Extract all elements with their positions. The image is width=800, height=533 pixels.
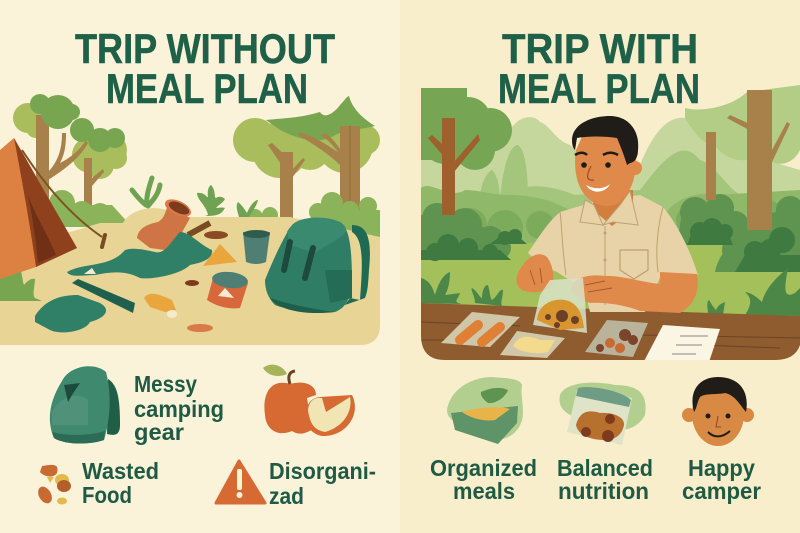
label: disorganized: zad <box>269 483 304 509</box>
bushes <box>421 194 800 272</box>
label: organized meals: meals <box>453 478 515 504</box>
label: organized meals: Organized <box>430 455 537 481</box>
label: messy camping gear: Messy <box>134 371 197 397</box>
trees <box>13 94 380 218</box>
label: balanced nutrition <box>557 455 653 504</box>
label: disorganized: Disorgani- <box>269 458 376 484</box>
icon: balanced nutrition bag <box>559 383 646 445</box>
icon: apple <box>263 365 355 436</box>
backpack <box>265 218 370 313</box>
plants over ground <box>0 272 42 301</box>
label: balanced nutrition: Balanced <box>557 455 653 481</box>
label: messy camping gear: camping <box>134 396 224 422</box>
label: wasted food: Wasted <box>82 458 159 484</box>
label: balanced nutrition: nutrition <box>558 478 649 504</box>
trees <box>428 90 790 230</box>
ziplock bag <box>533 278 587 333</box>
title: trip without meal plan: MEAL PLAN <box>106 65 308 112</box>
title: trip with meal plan: MEAL PLAN <box>498 65 700 112</box>
label: disorganized <box>269 458 376 509</box>
icon: wasted food <box>35 465 71 506</box>
label: wasted food: Food <box>82 482 132 508</box>
can <box>207 270 249 308</box>
title: trip with meal plan: TRIP WITH <box>502 25 698 72</box>
label: happy camper <box>682 455 761 504</box>
title: trip without meal plan: TRIP WITHOUT <box>75 25 335 72</box>
bushes and plants <box>49 178 383 238</box>
label: happy camper: camper <box>682 478 761 504</box>
label: organized meals <box>430 455 537 504</box>
icon: organized meals box <box>447 377 523 444</box>
label: messy camping gear <box>134 371 224 445</box>
meadow <box>421 243 800 320</box>
foreground plants <box>421 268 800 316</box>
table <box>421 303 800 360</box>
label: wasted food <box>82 458 159 508</box>
panel: forest scene with camper <box>421 85 800 365</box>
icon: backpack <box>50 366 120 444</box>
icon: warning triangle <box>216 461 265 503</box>
food packets <box>441 312 720 365</box>
forest background <box>421 85 800 243</box>
scattered items: orange sack and clothes <box>35 196 237 332</box>
tent <box>0 138 105 279</box>
icon: happy camper face <box>682 377 754 446</box>
cup <box>243 230 270 264</box>
title: trip without meal plan <box>75 25 335 112</box>
ground <box>0 208 380 345</box>
label: messy camping gear: gear <box>134 419 184 445</box>
label: happy camper: Happy <box>688 455 755 481</box>
panel: messy campsite scene <box>0 94 383 345</box>
title: trip with meal plan <box>498 25 700 112</box>
man <box>516 116 698 313</box>
